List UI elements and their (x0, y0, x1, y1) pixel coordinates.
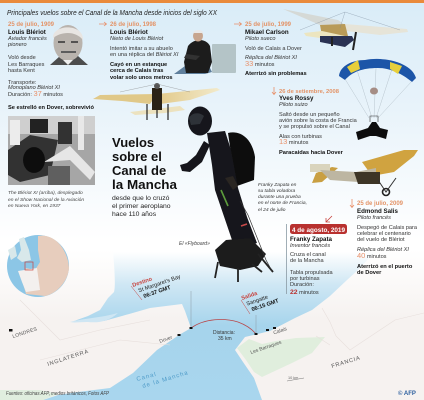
panel: Louis Blériot 1909: Duración: 37 minutos (8, 89, 63, 98)
panel: Mikael Carlson: 33 minutos (245, 59, 275, 68)
panel: Yves Rossy: Yves Rossy (279, 95, 314, 102)
panel: Louis Blériot 1998 (110, 22, 179, 81)
sources: Fuentes: oficinas AFP, medios británicos, Fotos AFP (6, 391, 110, 397)
panel: Edmond Salis: Piloto francés (357, 215, 391, 221)
panel: Louis Blériot 1998: Nieto de Louis Blériot (110, 36, 164, 42)
panel: Louis Blériot 1998: cerca de Calais tras (110, 68, 163, 74)
panel: Louis Blériot 1998: en una réplica del Blériot XI (110, 52, 179, 58)
panel: Edmond Salis: de Dover (357, 270, 382, 276)
panel: Louis Blériot 1998: 26 de julio, 1998 (110, 22, 157, 28)
panel: Edmond Salis: Despegó de Calais para (357, 225, 418, 231)
map labels and city markers (9, 326, 361, 390)
panel: Yves Rossy: Saltó desde un pequeño (279, 112, 340, 118)
distance label (213, 330, 235, 342)
panel: Louis Blériot 1909: Les Barraques (8, 62, 45, 68)
label: Flyboard: El «Flyboard» (179, 241, 210, 247)
plane: Carlson monoplane (283, 9, 408, 50)
title: el primer aeroplano (112, 203, 171, 210)
destination label: Destino (132, 276, 154, 289)
panel: Franky Zapata: 22 minutos (290, 289, 319, 296)
map labels and city markers: FRANCIA (331, 355, 361, 370)
destination label: 06:37 GMT (143, 285, 172, 300)
photo caption: en Nueva York, en 1937 (8, 203, 61, 209)
photo: Blériot portrait (50, 25, 88, 65)
photo caption (8, 190, 84, 209)
panel: Louis Blériot 1909: Monoplano Blériot XI (8, 85, 60, 91)
panel: Yves Rossy: 13 minutos (279, 137, 309, 146)
panel: Yves Rossy: Paracaidas hacia Dover (279, 150, 344, 156)
panel: Franky Zapata: Cruza el canal (290, 252, 326, 258)
map labels and city markers: Dover (159, 335, 174, 345)
caption: Franky Zapata: en el norte de Francia, (258, 200, 307, 206)
inset locator map (7, 235, 69, 297)
panel: Mikael Carlson: Aterrizó sin problemas (245, 71, 307, 77)
panel: Louis Blériot 1909: Voló desde (8, 55, 36, 61)
background sky (0, 0, 424, 240)
destination label: St Margaret's Bay (138, 274, 182, 294)
arrow (350, 199, 354, 208)
panel: Louis Blériot 1998: Intentó imitar a su abuelo (110, 46, 173, 52)
departure label: Salida (241, 291, 259, 302)
title: Canal de (112, 163, 166, 178)
panel: Franky Zapata: Tabla propulsada (290, 270, 333, 276)
top orange bar (0, 0, 424, 3)
panel: Mikael Carlson: Mikael Carlson (245, 29, 289, 36)
panel: Mikael Carlson (245, 22, 307, 77)
panel: Louis Blériot 1998: Cayó en un estanque (110, 62, 167, 68)
photo: Blériot XI at show (8, 116, 95, 185)
panel: Mikael Carlson: Voló de Calais a Dover (245, 46, 302, 52)
scale bar (287, 376, 304, 381)
title: sobre el (112, 149, 162, 164)
photo: seated pilot (174, 30, 236, 74)
panel: Louis Blériot 1909: Se estrelló en Dover, sobrevivió (8, 105, 95, 111)
panel: Edmond Salis: Edmond Salis (357, 208, 398, 215)
route arc (191, 320, 256, 334)
panel: Franky Zapata: por turbinas (290, 276, 320, 282)
sea (0, 240, 424, 400)
map labels and city markers: Les Barraques (250, 339, 283, 356)
plane: Blériot XI centre (93, 83, 220, 120)
panel: Edmond Salis: celebrar el centenario (357, 231, 411, 237)
caption: Franky Zapata: el 24 de julio (258, 207, 286, 213)
caption: Franky Zapata (258, 182, 307, 213)
departure label: 06:15 GMT (251, 298, 280, 313)
figure: Franky Zapata on Flyboard (180, 106, 273, 282)
title: desde que lo cruzó (112, 195, 170, 202)
plane: gold monoplane (310, 150, 418, 196)
panel: Edmond Salis: 40 minutos (357, 251, 387, 260)
panel: Louis Blériot 1909: pionero (7, 42, 27, 48)
distance label: 35 km (218, 336, 232, 342)
panel: Franky Zapata: Duración: (290, 282, 314, 288)
panel: Franky Zapata: de la Mancha (290, 258, 324, 264)
parachute (339, 59, 416, 118)
panel: Yves Rossy: Alas con turbinas (279, 134, 322, 140)
panel: Mikael Carlson: Réplica del Blériot XI (245, 55, 297, 61)
panel: Louis Blériot 1909 (7, 22, 95, 111)
AFP credit: © AFP (398, 390, 416, 397)
torso and legs (207, 131, 257, 247)
title: hace 110 años (112, 211, 157, 218)
panel: Franky Zapata (286, 224, 347, 296)
arrow: red (326, 216, 332, 222)
caption: Franky Zapata: durante una prueba (258, 194, 301, 200)
panel: Edmond Salis (357, 201, 418, 276)
panel: Louis Blériot 1909: Transporte: (8, 80, 37, 86)
panel: Louis Blériot 1909: Louis Blériot (8, 29, 46, 36)
estuary inlet (70, 313, 118, 322)
destination label (131, 267, 191, 328)
title (112, 135, 178, 218)
panel: Mikael Carlson: Piloto sueco (245, 36, 275, 42)
panel: Louis Blériot 1998: Louis Blériot (110, 29, 148, 36)
panel: Franky Zapata: Inventor francés (290, 243, 330, 249)
jetman wing (356, 116, 388, 140)
panel: Louis Blériot 1998: volar solo unos metros (110, 75, 173, 81)
panel: Louis Blériot 1909: Aviador francés (7, 36, 47, 42)
backpack (228, 132, 255, 186)
arrow (272, 87, 276, 94)
arm (180, 141, 210, 172)
title: la Mancha (112, 177, 178, 192)
panel: Franky Zapata: 4 de agosto, 2019 (292, 227, 345, 234)
panel: Yves Rossy: avión sobre la costa de Francia (279, 118, 358, 124)
helmet (188, 106, 212, 136)
panel: Edmond Salis: del vuelo de Blériot (357, 237, 405, 243)
title: Vuelos (112, 135, 154, 150)
board (215, 238, 266, 270)
panel: Edmond Salis: Aterrizó en el puerto (357, 264, 413, 270)
distance label: Distancia: (213, 330, 235, 336)
panel: Yves Rossy (279, 89, 358, 156)
caption: Franky Zapata: Franky Zapata en (258, 182, 297, 188)
arrow (234, 22, 242, 26)
land: England (0, 240, 191, 400)
caption: Franky Zapata: su tabla voladora (258, 188, 296, 194)
panel: Louis Blériot 1909: hasta Kent (8, 68, 35, 74)
panel: Yves Rossy: y se propulsó sobre el Canal (279, 124, 350, 130)
green lowlands (0, 390, 58, 400)
header text: Principales vuelos sobre el Canal de la Mancha desde inicios del siglo XX (7, 10, 217, 17)
map labels and city markers: Canal (136, 372, 158, 383)
departure label: Sangatte (246, 295, 269, 308)
panel: Louis Blériot 1909: 25 de julio, 1909 (8, 22, 55, 28)
panel: Edmond Salis: 25 de julio, 2009 (357, 201, 404, 207)
panel: Yves Rossy: 26 de setiembre, 2008 (279, 89, 340, 95)
departure label (241, 285, 280, 333)
panel: Edmond Salis: Réplica del Blériot XI (357, 247, 409, 253)
map labels and city markers: INGLATERRA (47, 349, 90, 368)
map (0, 240, 424, 400)
panel: Mikael Carlson: 25 de julio, 1999 (245, 22, 292, 28)
arrow (99, 22, 106, 26)
scale bar: 10 km (288, 376, 298, 380)
map labels and city markers: Calais (273, 326, 288, 336)
photo caption: The Blériot XI (arriba), desplegado (8, 190, 83, 196)
panel: Franky Zapata: Franky Zapata (290, 236, 333, 243)
photo caption: en el Show Nacional de la Aviación (8, 197, 84, 203)
map labels and city markers: LONDRES (12, 326, 38, 340)
borders (20, 300, 424, 360)
map labels and city markers: de la Mancha (142, 370, 190, 390)
panel: Yves Rossy: Piloto suizo (279, 102, 308, 108)
land: France (235, 240, 424, 400)
